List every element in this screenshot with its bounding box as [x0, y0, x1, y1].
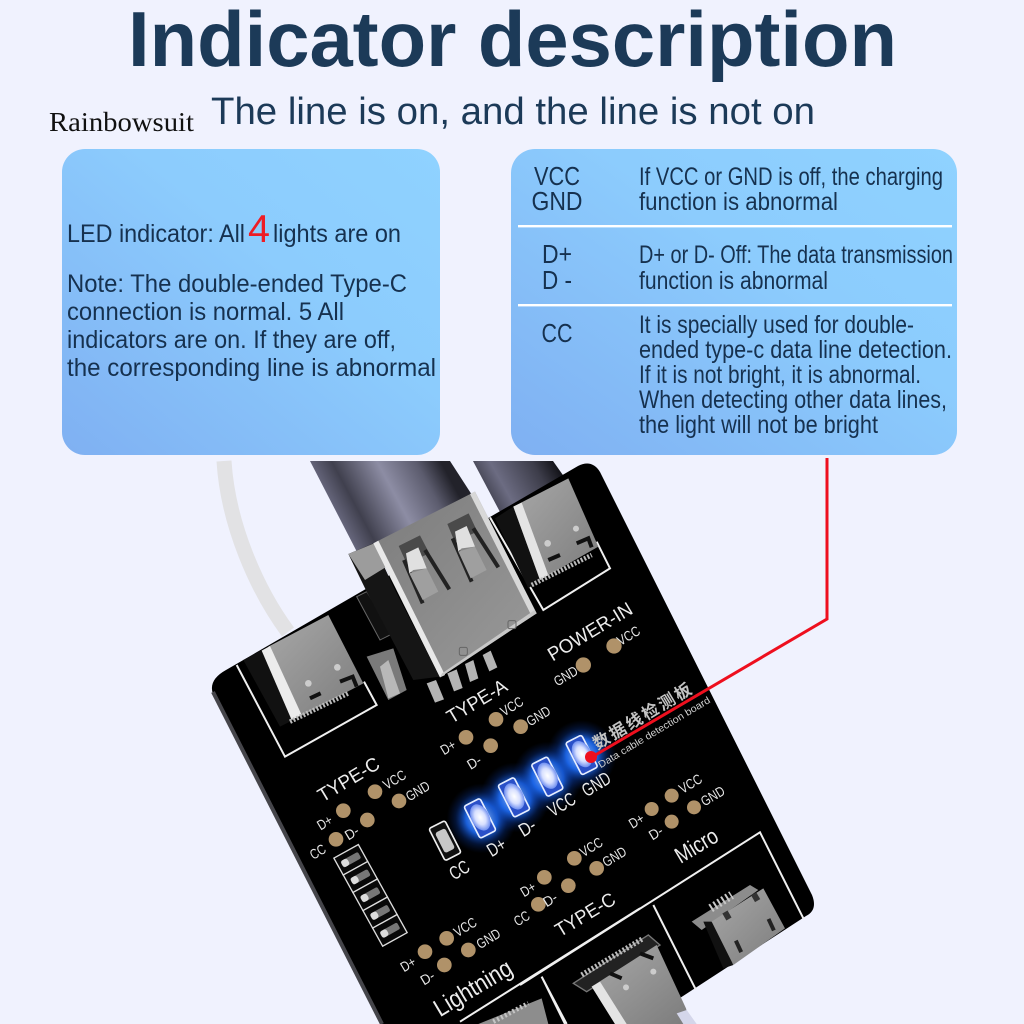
lower TYPE-C block: VCC: [577, 834, 605, 860]
micro pads and labels: Micro: [670, 822, 723, 868]
row: VCC GND: VCC: [534, 161, 580, 191]
row: D+ D-: D+: [542, 239, 572, 269]
LED labels: [445, 767, 614, 884]
row: CC: If it is not bright, it is abnormal.: [639, 361, 921, 389]
panel: signal table: [511, 149, 957, 455]
lower TYPE-C block: TYPE-C: [552, 889, 620, 942]
resistor array: [334, 845, 407, 946]
micro connector: [692, 885, 785, 968]
POWER-IN block: VCC: [614, 622, 643, 649]
lightning connector: [460, 908, 640, 1024]
small cable: [473, 461, 565, 512]
left TYPE-C block: D+: [314, 812, 335, 833]
LED labels: D-: [515, 814, 540, 841]
LED indicator line: lights are on: [273, 220, 401, 248]
red pointer line: [585, 458, 827, 763]
board name: 数据线检测板: [589, 679, 695, 753]
LED labels: VCC: [544, 788, 579, 821]
LED labels: CC: [445, 856, 473, 884]
row: D+ D-: D+ or D- Off: The data transmission: [639, 241, 953, 269]
row: VCC GND: If VCC or GND is off, the charging: [639, 163, 943, 191]
row: CC: ended type-c data line detection.: [639, 336, 952, 364]
note text: indicators are on. If they are off,: [67, 326, 396, 354]
row: CC: It is specially used for double-: [639, 311, 914, 339]
TYPE-A block: D+: [437, 736, 459, 758]
note text: [67, 270, 436, 382]
right type-c connector: [495, 478, 598, 588]
LED: GND on: [565, 735, 598, 775]
left TYPE-C block: VCC: [380, 766, 409, 793]
LED: VCC on: [531, 756, 564, 797]
TYPE-A block: [437, 676, 553, 773]
row: CC: When detecting other data lines,: [639, 386, 947, 414]
lower TYPE-C block: [511, 834, 629, 942]
board: [212, 464, 814, 1024]
board name: [589, 679, 712, 771]
lower TYPE-C block: D-: [540, 889, 560, 910]
LED: D+ on: [464, 798, 497, 838]
row: CC: the light will not be bright: [639, 411, 878, 439]
row: D+ D-: [542, 239, 953, 295]
micro pads and labels: D-: [646, 822, 666, 843]
LED indicator line: [67, 208, 401, 251]
TYPE-A block: TYPE-A: [443, 676, 511, 728]
micro pads and labels: GND: [698, 782, 728, 809]
lower TYPE-C block: CC: [511, 907, 533, 929]
row: D+ D-: D -: [542, 265, 572, 295]
LED indicator line: LED indicator: All: [67, 220, 245, 248]
row: CC: [542, 311, 952, 439]
middle board area: [307, 720, 640, 1024]
row: D+ D-: function is abnormal: [639, 267, 828, 295]
left TYPE-C block: D-: [342, 822, 362, 843]
note text: connection is normal. 5 All: [67, 298, 344, 326]
left TYPE-C block: GND: [403, 777, 433, 804]
left TYPE-C block: CC: [307, 841, 329, 863]
panel: LED indicator note: [62, 149, 440, 455]
Lightning block: D-: [417, 967, 438, 988]
USB-A connector: [348, 492, 537, 680]
lower TYPE-C block: GND: [599, 843, 629, 870]
LED: CC off: [429, 821, 461, 861]
TYPE-A block: GND: [523, 702, 553, 729]
lower TYPE-C block: D+: [517, 878, 539, 900]
lower right board area: [520, 679, 803, 1024]
connector outlines: [520, 832, 803, 1024]
micro pads and labels: [626, 770, 728, 868]
left TYPE-C block: TYPE-C: [314, 754, 384, 807]
LED labels: D+: [483, 833, 510, 861]
note text: the corresponding line is abnormal: [67, 354, 436, 382]
board edge: [213, 692, 382, 1024]
note text: Note: The double-ended Type-C: [67, 270, 407, 298]
LED labels: GND: [578, 767, 614, 801]
left type-c connector: [243, 615, 363, 727]
subtitle: The line is on, and the line is not on: [211, 91, 815, 133]
micro pads and labels: D+: [626, 810, 647, 832]
detection board photo: [212, 461, 814, 1024]
row: VCC GND: GND: [532, 186, 582, 216]
LED: D- on: [498, 777, 531, 817]
row: CC: CC: [542, 318, 572, 348]
board name: Data cable detection board: [597, 695, 712, 771]
connector outlines: [237, 517, 610, 757]
row: VCC GND: [532, 161, 943, 216]
LED indicator line: 4: [248, 208, 270, 251]
large cable: [310, 461, 472, 552]
row: VCC GND: function is abnormal: [639, 188, 838, 216]
Lightning block: D+: [397, 953, 419, 975]
white cable: [224, 461, 288, 632]
Lightning block: [397, 914, 517, 1022]
upper board area: connectors and labels: [237, 478, 643, 773]
Lightning block: VCC: [451, 914, 479, 940]
TYPE-A block: D-: [464, 751, 484, 773]
POWER-IN block: POWER-IN: [544, 599, 637, 666]
micro pads and labels: VCC: [676, 770, 705, 797]
bottom type-c connector: [573, 935, 697, 1024]
left TYPE-C block: [307, 754, 433, 863]
Lightning block: GND: [473, 925, 503, 952]
POWER-IN block: GND: [551, 662, 581, 689]
LED glow: [447, 720, 617, 853]
watermark: Rainbowsuit: [49, 107, 195, 137]
Lightning block: Lightning: [429, 955, 517, 1022]
TYPE-A block: VCC: [497, 693, 526, 719]
USB pins: [427, 651, 497, 703]
parts behind USB: [357, 592, 427, 700]
